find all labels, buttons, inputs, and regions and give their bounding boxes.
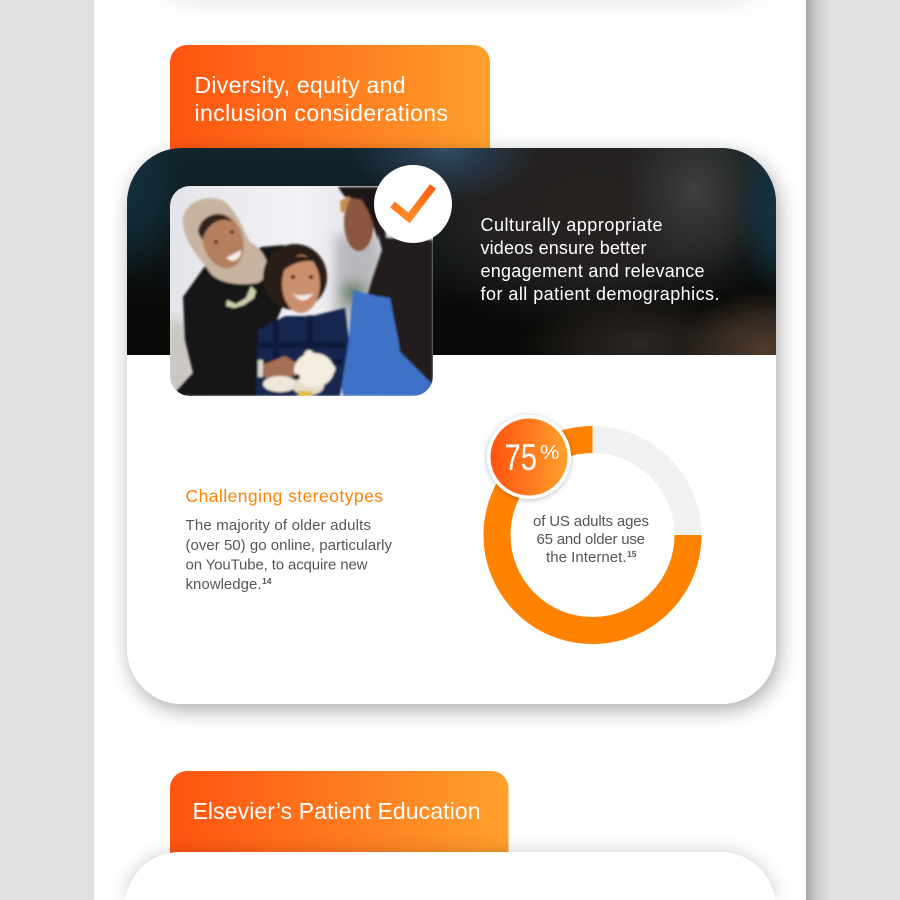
child hair — [263, 244, 327, 310]
next card — [125, 852, 775, 900]
body copy: culturally appropriate videos: videos ensure better — [480, 238, 646, 258]
mother hijab — [183, 198, 268, 284]
stat badge: 75%: % — [540, 442, 560, 464]
text block: challenging stereotypes — [186, 486, 392, 593]
heading: diversity, equity and inclusion: Diversity, equity and — [194, 72, 406, 98]
nurse scrubs — [340, 290, 433, 396]
donut caption: the Internet. — [546, 549, 626, 566]
heading: Elsevier's Patient Education: Elsevier’s Patient Education — [192, 798, 480, 824]
main card — [118, 142, 792, 722]
body copy: culturally appropriate videos: Culturally appropriate — [480, 215, 662, 235]
subheading: Challenging stereotypes — [186, 486, 383, 506]
paragraph: knowledge. — [186, 576, 262, 593]
body copy: culturally appropriate videos: engagement and relevance — [480, 261, 704, 281]
body copy: culturally appropriate videos: for all patient demographics. — [480, 284, 720, 304]
stat badge: 75%: 75 — [504, 437, 537, 478]
paragraph: (over 50) go online, particularly — [186, 537, 392, 554]
mother sweater — [172, 245, 295, 396]
icon: check mark badge — [374, 165, 452, 243]
donut caption: 15 — [627, 549, 637, 559]
teddy bear — [263, 376, 297, 392]
nurse hair and head — [350, 186, 433, 385]
donut caption: 65 and older use — [536, 531, 645, 548]
previous section card shadow — [150, 0, 775, 20]
stat badge: 75% — [487, 415, 571, 499]
heading: diversity, equity and inclusion: inclusion considerations — [194, 100, 448, 126]
child face — [282, 255, 320, 313]
paragraph: on YouTube, to acquire new — [186, 556, 368, 574]
paragraph: 14 — [262, 576, 272, 586]
donut chart: 75 percent — [487, 415, 688, 630]
donut caption: of US adults ages — [533, 513, 649, 530]
section tab: Elsevier's Patient Education — [170, 771, 508, 871]
necklace — [226, 286, 256, 308]
dark header band — [127, 148, 776, 355]
child shirt — [256, 308, 349, 396]
mother hand and bracelet — [262, 356, 297, 378]
mother face — [202, 212, 245, 270]
photo: mother, child and nurse — [165, 186, 433, 400]
section tab: diversity heading — [170, 45, 490, 170]
paragraph: The majority of older adults — [186, 517, 371, 534]
